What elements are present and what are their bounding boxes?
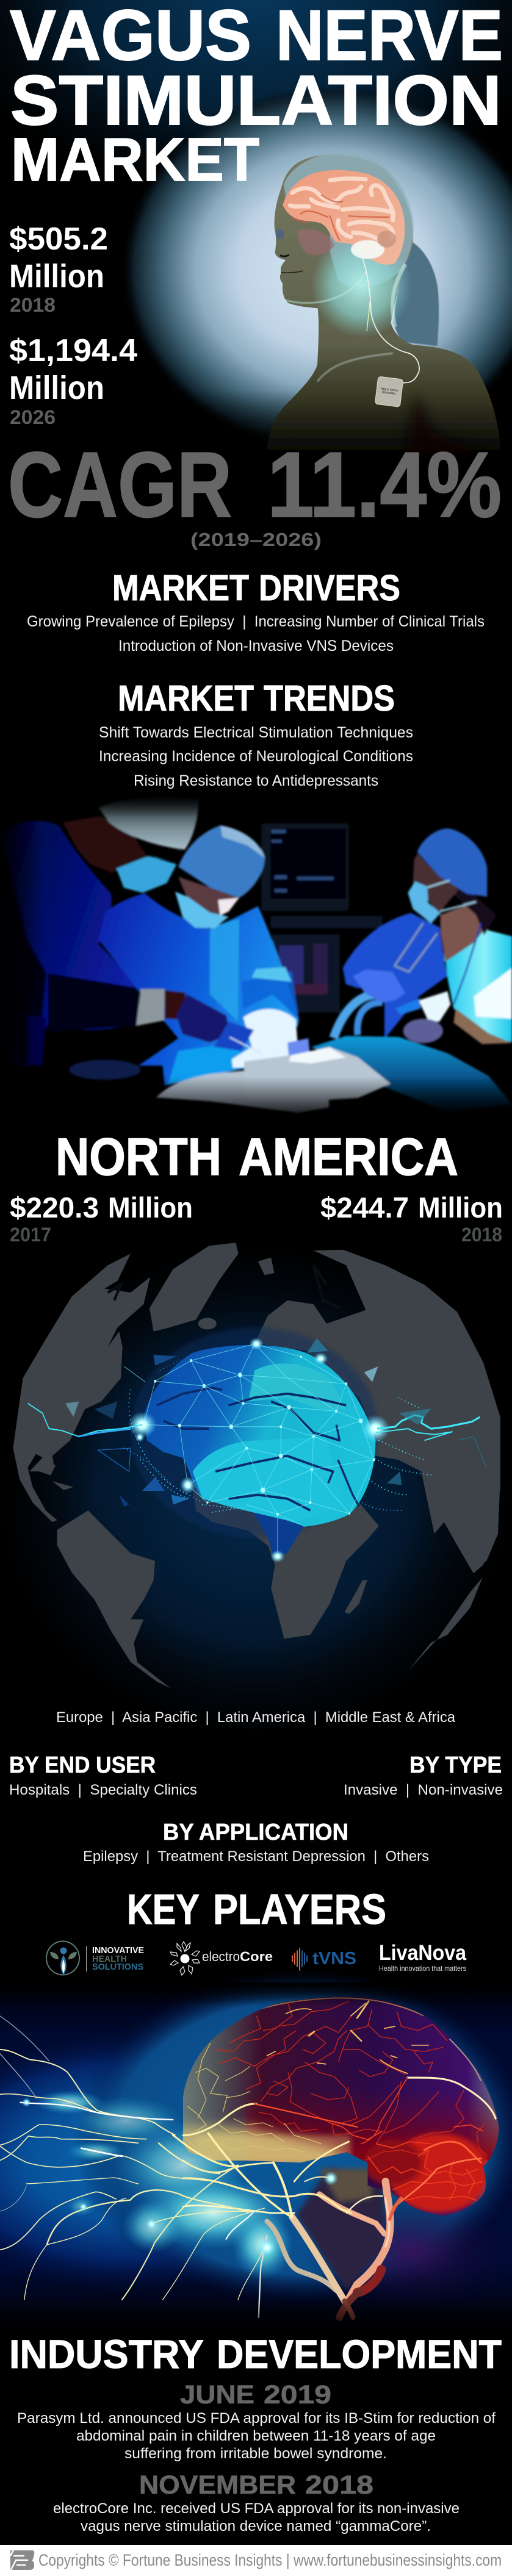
north america heading: AMERICA (239, 1128, 458, 1186)
development: November 2018 (53, 2470, 460, 2535)
development: November 2018: electroCore Inc. received US FDA approval for its non-invasive (53, 2500, 460, 2517)
segment: by application: Epilepsy | Treatment Resistant Depression | Others (83, 1848, 429, 1865)
development: June 2019: suffering from irritable bowel syndrome. (124, 2445, 387, 2462)
regions list: Europe | Asia Pacific | Latin America | Middle East & Africa (56, 1709, 456, 1726)
market value 2026: $1,194.4 (9, 333, 137, 368)
implant device: Stimulator (381, 390, 396, 396)
market value 2018: $505.2 (9, 221, 108, 257)
segment: by type (344, 1753, 503, 1798)
nurse cap (417, 828, 487, 897)
digital brain (124, 1338, 390, 1563)
title: MARKET (11, 126, 259, 194)
lower face hollow (297, 229, 334, 255)
market trends: Increasing Incidence of Neurological Conditions (99, 748, 413, 765)
market drivers: DRIVERS (259, 568, 400, 608)
bright lower gown (168, 1042, 248, 1085)
body silhouette (266, 154, 501, 457)
nurse face (413, 853, 458, 916)
nurse scrubs (343, 913, 447, 1039)
segment: by type: Invasive | Non-invasive (344, 1782, 503, 1798)
north america 2017 value: 2017 (10, 1224, 51, 1246)
north america 2018 value: $244.7 (320, 1191, 409, 1224)
world map globe with digital brain (0, 1242, 512, 1740)
sulci (157, 1388, 359, 1510)
implant device (375, 376, 403, 407)
logo: electroCore: Core (240, 1949, 273, 1964)
segment: by application (83, 1820, 429, 1865)
nurse gloves (353, 969, 405, 1003)
brain (283, 170, 405, 265)
logo: Innovative Health Solutions: INNOVATIVE (92, 1945, 144, 1956)
market drivers: MARKET (112, 568, 249, 608)
CAGR figure: CAGR (8, 433, 232, 537)
north america 2018 value (320, 1191, 503, 1246)
implant device: Vagus Nerve (380, 387, 398, 393)
dark chest (405, 392, 496, 457)
golden nerves under the brain (208, 2133, 292, 2217)
nerve sparks (22, 2098, 157, 2230)
CAGR figure: (2019–2026) (190, 529, 322, 550)
segment: by end user (9, 1753, 197, 1798)
title: STIMULATION (10, 62, 502, 140)
north america 2017 value (10, 1191, 193, 1246)
logo: LivaNova: LivaNova (379, 1941, 466, 1965)
north america 2017 value: $220.3 (10, 1191, 99, 1224)
north america 2017 value: Million (108, 1191, 193, 1224)
scattered particles (124, 1358, 434, 1512)
industry development heading (9, 2331, 502, 2377)
illustration: glowing brain with electric nerves (0, 1970, 512, 2337)
development: June 2019: 2019 (264, 2380, 331, 2409)
development: June 2019: Parasym Ltd. announced US FDA approval for its IB-Stim for reduction of (17, 2410, 496, 2427)
logo: tVNS: tVNS (312, 1949, 356, 1968)
spark highlights (128, 1338, 390, 1563)
surgeon 1 head (63, 816, 147, 873)
title (10, 0, 503, 194)
cerebrum (175, 1997, 508, 2215)
floating triangles (65, 1338, 431, 1507)
continents (13, 1243, 500, 1688)
development: November 2018: NOVEMBER (139, 2470, 296, 2500)
rim of the crown (246, 1998, 424, 2016)
segment: by end user: Hospitals | Specialty Clinics (9, 1782, 197, 1798)
market trends: Rising Resistance to Antidepressants (134, 772, 378, 789)
skull translucent (284, 152, 414, 287)
logo: tVNS (292, 1948, 356, 1970)
logo: Innovative Health Solutions (46, 1941, 144, 1975)
market value 2018 (9, 221, 108, 316)
white glove and sleeve (232, 1009, 299, 1067)
nurse chest skin (441, 901, 482, 962)
segment: by type: BY TYPE (409, 1753, 502, 1778)
brain glow halo (131, 1327, 379, 1538)
development: June 2019: JUNE (180, 2380, 254, 2409)
photo illustration: surgeons in operating theatre (0, 791, 512, 1122)
market drivers: Growing Prevalence of Epilepsy | Increasing Number of Clinical Trials (27, 613, 485, 630)
segment: by application: BY APPLICATION (163, 1820, 348, 1845)
development: June 2019: abdominal pain in children between 11-18 years of age (76, 2428, 436, 2444)
segment: by end user: BY END USER (9, 1753, 156, 1778)
market trends: MARKET (118, 678, 254, 719)
north america heading (56, 1128, 458, 1186)
surgeon 1 hand and cuff (136, 989, 165, 1026)
ponytail (393, 241, 439, 346)
logo: electroCore (170, 1942, 273, 1975)
hot vessels on crown (267, 2001, 428, 2073)
key players heading: KEY (127, 1885, 200, 1933)
icon: Fortune Business Insights logo (10, 2550, 34, 2570)
surgeon 2 head (178, 877, 239, 917)
surgical sheet (156, 1069, 329, 1113)
monitors (261, 823, 383, 1013)
market value 2018: Million (9, 258, 104, 295)
neck glow (311, 233, 412, 337)
red lower network (330, 2123, 483, 2200)
logo: Innovative Health Solutions: SOLUTIONS (92, 1962, 143, 1972)
development: November 2018: vagus nerve stimulation device named “gammaCore”. (81, 2518, 431, 2535)
logo: LivaNova: Health innovation that matters (379, 1964, 466, 1973)
development: June 2019 (17, 2380, 496, 2462)
eye (276, 229, 284, 239)
north america heading: NORTH (56, 1128, 222, 1186)
market value 2026: Million (9, 370, 104, 406)
development: November 2018: 2018 (305, 2470, 373, 2500)
blue and teal glow field (0, 1970, 512, 2312)
market drivers (27, 568, 485, 655)
shadow under brain (297, 2169, 384, 2291)
surgeon 1 gown (0, 820, 136, 1066)
hair and straps (453, 880, 496, 935)
market value 2026 (9, 333, 137, 428)
north america 2018 value: Million (418, 1191, 503, 1224)
tray (69, 1060, 140, 1080)
nurse mask (408, 881, 441, 924)
logo: electroCore: electro (202, 1949, 240, 1964)
market drivers: Introduction of Non-Invasive VNS Devices (118, 637, 394, 655)
electric nerves (0, 2016, 264, 2300)
cortical vessels (215, 2001, 487, 2161)
market trends: TRENDS (264, 678, 395, 719)
industry development heading: INDUSTRY (9, 2331, 204, 2377)
logo: Innovative Health Solutions: HEALTH (92, 1954, 127, 1964)
mesh lines (124, 1344, 374, 1555)
market trends: Shift Towards Electrical Stimulation Techniques (99, 724, 413, 741)
nostril and lips (280, 255, 289, 256)
hero section: illustration of head with implant (0, 0, 512, 464)
market value 2026: 2026 (10, 406, 56, 428)
key players heading: PLAYERS (213, 1885, 386, 1933)
CAGR figure (8, 433, 502, 550)
arctic detail (108, 1265, 340, 1308)
market trends (99, 678, 413, 789)
key players heading (127, 1885, 386, 1933)
market value 2018: 2018 (10, 294, 56, 316)
patient blanket (311, 1036, 512, 1112)
neural nodes (154, 1355, 375, 1516)
lightning arcs (27, 1404, 486, 1468)
stethoscope (395, 923, 438, 972)
footer (0, 2545, 512, 2576)
nerve trunk and branches (267, 2222, 336, 2291)
nerve lead wire (360, 254, 419, 383)
surgeon 2 gown (99, 893, 300, 1086)
breathing tubes (334, 994, 378, 1038)
main arteries (183, 2078, 496, 2317)
north america 2018 value: 2018 (461, 1224, 502, 1246)
golden vessels on left lobe (187, 2043, 322, 2158)
white drape (244, 1047, 391, 1102)
